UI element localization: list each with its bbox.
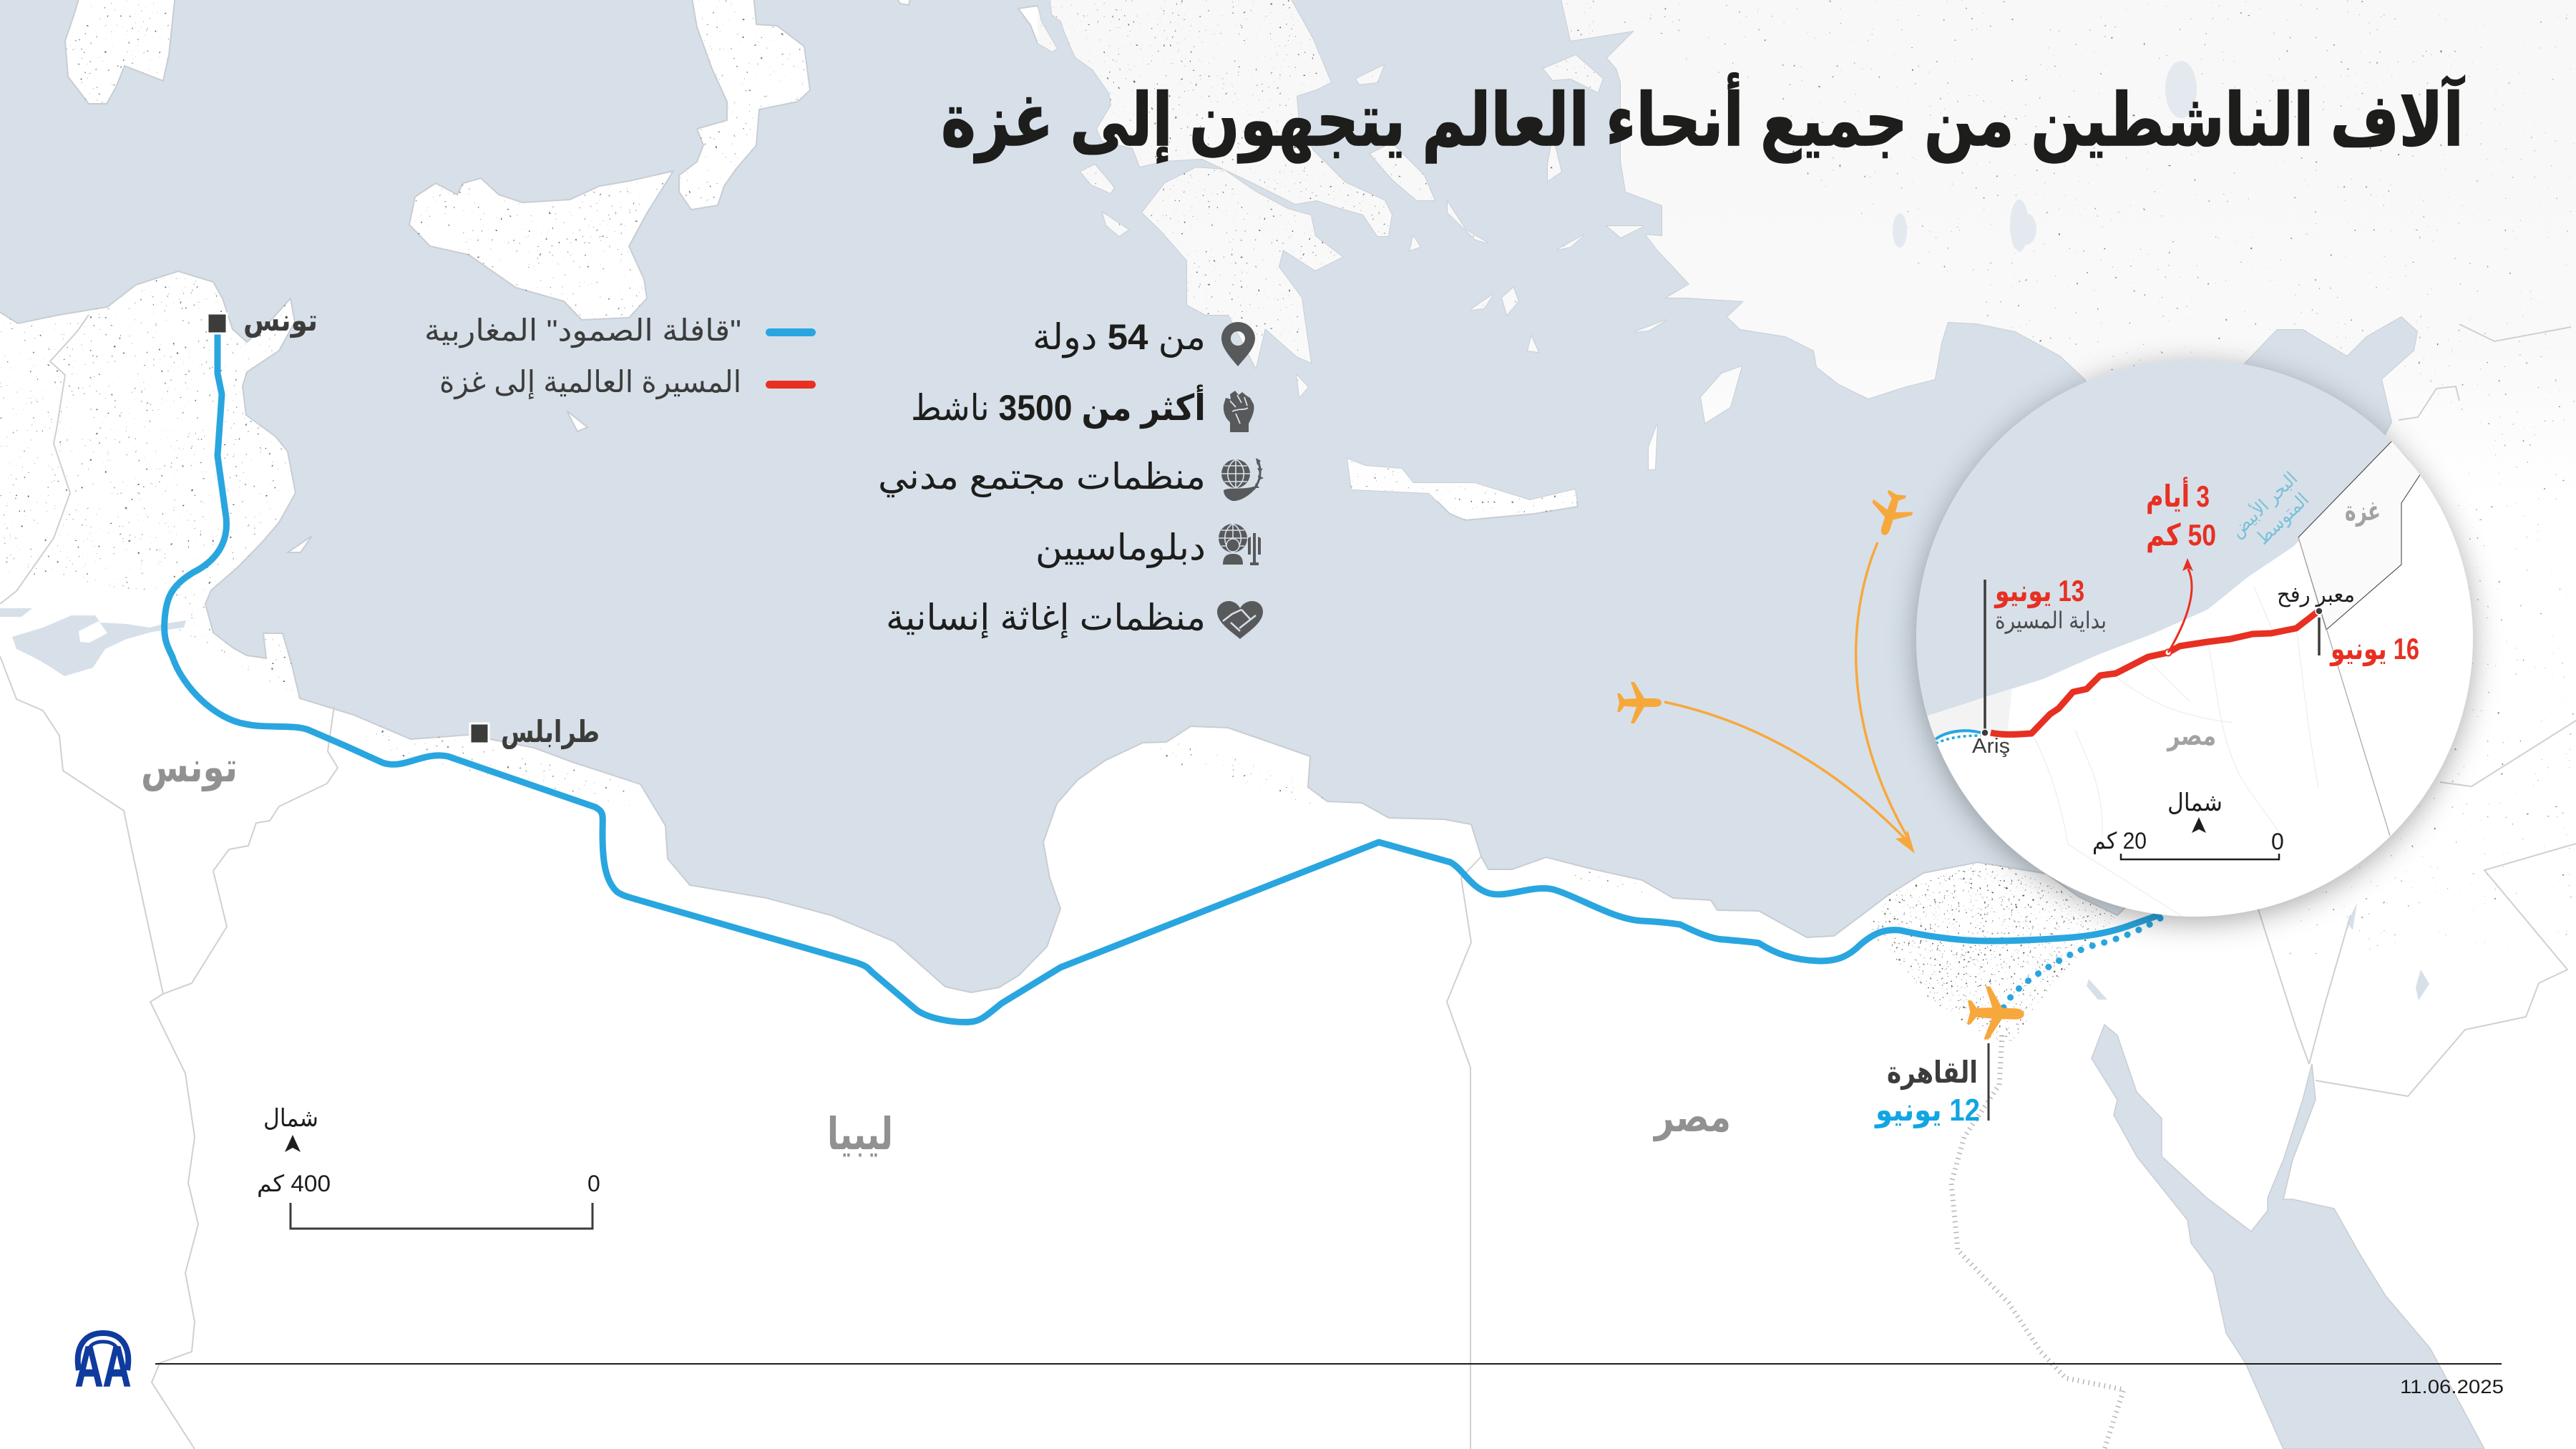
label: 13 June: 13 يونيو bbox=[1994, 574, 2084, 609]
route: Maghreb Sumud convoy bbox=[165, 335, 2159, 1022]
footer rule bbox=[155, 1363, 2502, 1365]
marker: Tunis city bbox=[208, 303, 318, 338]
north arrow and scale bar: 0 bbox=[587, 1171, 600, 1196]
label: Tunisia: تونس bbox=[141, 744, 238, 792]
label: Aris: Ariş bbox=[1972, 735, 2010, 758]
logo: Anadolu Agency: AA bbox=[75, 1335, 131, 1398]
item: diplomats: دبلوماسيين bbox=[1035, 527, 1206, 568]
callout: Cairo: القاهرة bbox=[1887, 1055, 1978, 1091]
marker: Tunis city: تونس bbox=[243, 303, 318, 338]
callout: start line bbox=[1984, 580, 1986, 733]
icon: plane west bbox=[1617, 682, 1662, 723]
route: Cairo dotted link bbox=[2004, 917, 2162, 1008]
inset Gaza strip bbox=[2298, 441, 2421, 630]
inset north arrow and scale: 0 bbox=[2271, 829, 2284, 854]
item: 3500 activists: أكثر من 3500 ناشط bbox=[911, 384, 1206, 429]
inset border Egypt bbox=[2298, 537, 2390, 836]
flight arrow 1 bbox=[1856, 542, 1906, 835]
item: 54 countries bbox=[1033, 317, 1255, 366]
inset sea label: البحر الأبيض bbox=[2225, 467, 2302, 542]
label: 16 June: 16 يونيو bbox=[2329, 632, 2419, 667]
inset blue route bbox=[1936, 731, 1981, 739]
red route bbox=[1991, 611, 2318, 734]
logo: Anadolu Agency bbox=[75, 1333, 131, 1398]
item: 54 countries: من 54 دولة bbox=[1033, 317, 1206, 358]
marker: Tripoli city: طرابلس bbox=[501, 715, 600, 750]
label: Libya: ليبيا bbox=[827, 1110, 893, 1159]
callout: Cairo bbox=[1874, 1043, 1989, 1128]
inset north arrow and scale: شمال bbox=[2167, 789, 2223, 816]
dot: Al-Arish bbox=[1981, 729, 1989, 736]
inset label Gaza: غزة bbox=[2345, 497, 2381, 527]
label: 50 km: 50 كم bbox=[2146, 518, 2216, 552]
inset roads bbox=[2031, 587, 2318, 917]
inset dotted route bbox=[1936, 736, 1981, 743]
inset circle: Al-Arish to Rafah bbox=[1899, 348, 2490, 940]
flight arrowhead bbox=[1896, 830, 1915, 854]
label: 3 days: 3 أيام bbox=[2146, 477, 2210, 514]
label: start of march: بداية المسيرة bbox=[1995, 608, 2107, 634]
item: diplomats bbox=[1035, 524, 1261, 568]
legend bbox=[424, 313, 816, 400]
legend item: Global March: المسيرة العالمية إلى غزة bbox=[439, 365, 741, 400]
north arrow and scale bar: شمال bbox=[263, 1105, 318, 1132]
item: civil society organisations: منظمات مجتمع مدني bbox=[878, 457, 1206, 498]
callout: Cairo: 12 يونيو bbox=[1874, 1093, 1980, 1128]
flight arrow 2 bbox=[1664, 702, 1909, 843]
inset north arrow and scale bbox=[2092, 789, 2284, 859]
legend item: Sumud convoy: "قافلة الصمود" المغاربية bbox=[424, 313, 741, 348]
icon: plane north bbox=[1864, 487, 1917, 541]
arrow: march distance bbox=[2168, 558, 2193, 653]
label: Rafah crossing: معبر رفح bbox=[2277, 583, 2355, 608]
icon: plane Cairo bbox=[1966, 986, 2025, 1040]
inset urban Al-Arish bbox=[1926, 688, 2012, 737]
participants list bbox=[878, 317, 1264, 639]
inset sea label: المتوسط bbox=[2252, 489, 2313, 550]
date: 11.06.2025 bbox=[2400, 1376, 2504, 1397]
dot: midpoint bbox=[2165, 650, 2171, 655]
north arrow and scale bar bbox=[257, 1105, 600, 1229]
item: humanitarian organisations: منظمات إغاثة إنسانية bbox=[886, 597, 1206, 639]
dot: Rafah bbox=[2316, 608, 2323, 615]
callout: 16 June line bbox=[2318, 618, 2321, 655]
inset sea bbox=[1916, 360, 2391, 716]
north arrow and scale bar: 400 كم bbox=[257, 1171, 331, 1196]
marker: Tripoli city bbox=[470, 715, 600, 750]
inset label Egypt: مصر bbox=[2166, 721, 2216, 751]
label: Egypt: مصر bbox=[1653, 1094, 1731, 1142]
inset north arrow and scale: 20 كم bbox=[2092, 828, 2147, 854]
